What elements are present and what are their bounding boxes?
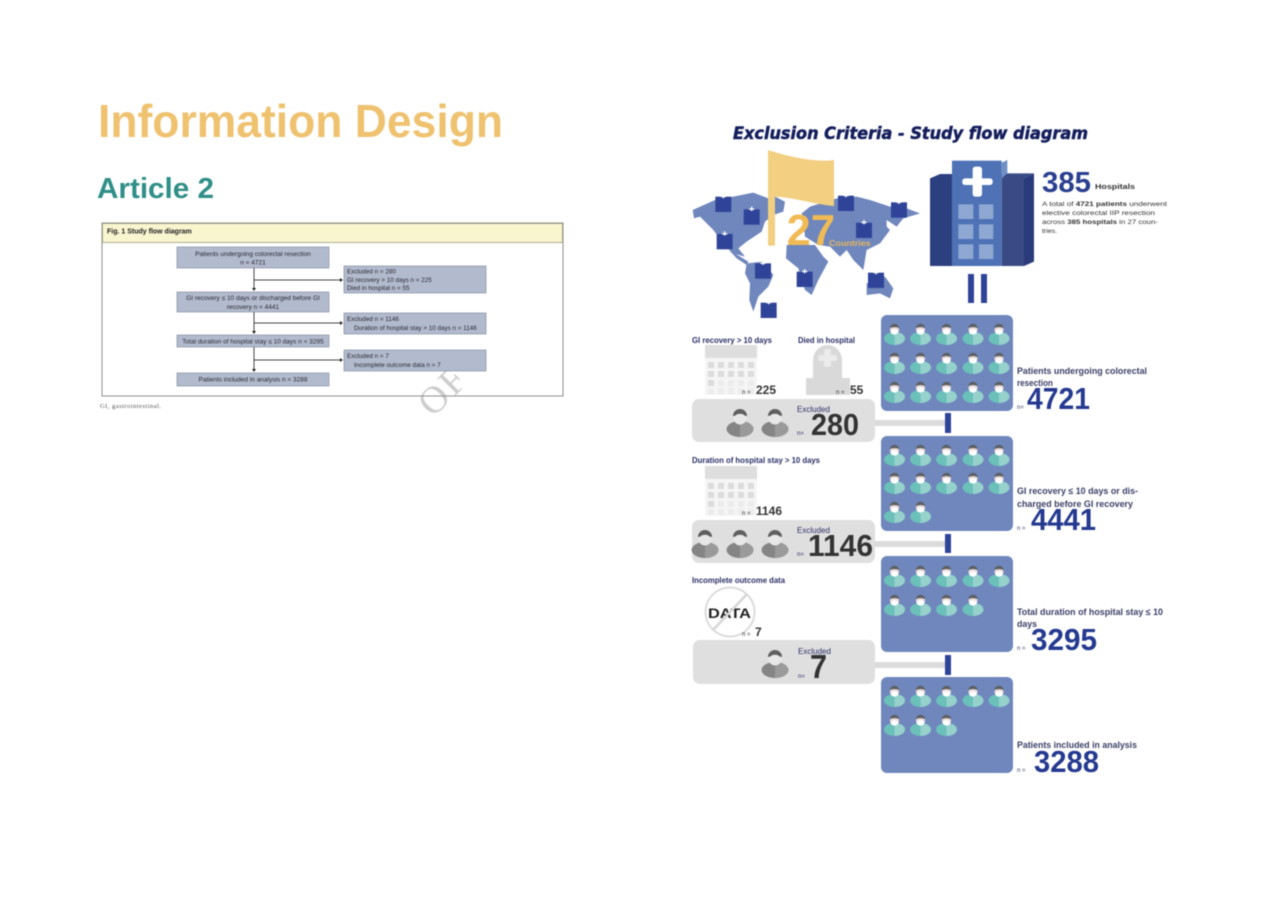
count 7: n = [742,632,751,638]
label: total duration 3295: days [1017,619,1037,629]
icon: calendar [705,466,757,516]
exclusion box 1: GI recovery > 10 days n = 225 [347,277,432,284]
label: GI recovery 4441 [1017,486,1138,537]
label: GI recovery 4441: GI recovery ≤ 10 days or dis- [1017,486,1138,496]
block: incomplete outcome data exclusion [692,576,786,639]
hospitals description: tries. [1042,228,1057,235]
flow box: included in analysis: Patients included in analysis n = 3288 [199,376,308,384]
label: GI recovery 4441: charged before GI recovery [1017,499,1133,509]
flow connector arrows [252,268,343,372]
flag [768,150,834,246]
panel: excluded 1146 [692,520,875,563]
flow box: included in analysis [177,373,329,386]
watermark fragment: OF [410,357,477,424]
title: Information Design: Information Design [98,95,503,147]
exclusion box 2: Excluded n = 1146 [347,316,399,323]
label: patients undergoing colorectal resection 4721: resection [1017,378,1053,388]
hospitals description: A total of 4721 patients underwent [1042,201,1167,208]
figure footnote: GI, gastrointestinal. [100,403,161,410]
panel: excluded 7 [693,640,875,685]
block: GI recovery exclusion [692,336,776,397]
label: total duration 3295 [1017,607,1163,657]
countries label: Countries [829,239,871,248]
panel: excluded 280 [692,399,875,442]
panel: excluded 7: 7 [810,648,827,685]
flow box: patients undergoing colorectal resection: n = 4721 [240,260,266,266]
label: total duration 3295: n = [1017,646,1026,652]
exclusion box 3 [344,350,486,371]
hospitals description: across 385 hospitals in 27 coun- [1042,219,1158,226]
panel: excluded 1146: 1146 [808,528,873,563]
heading: Article 2: Article 2 [97,173,214,205]
panel: original study flow diagram figure [100,223,563,424]
panel: excluded 280: n= [797,431,804,437]
385 number: 385 [1042,167,1091,199]
label: GI recovery over 10 days: GI recovery > 10 days [692,336,773,345]
flow box: patients undergoing colorectal resection: Patients undergoing colorectal resection [195,251,311,258]
count 1146: 1146 [756,504,782,518]
label: duration of hospital stay: Duration of hospital stay > 10 days [692,456,821,465]
panel: 4441 patients icons [881,436,1013,531]
icon: tombstone [806,345,850,395]
panel: 3288 patients icons [881,677,1013,773]
flow box: GI recovery: recovery n = 4441 [227,304,279,311]
connector bar 1 [945,413,951,433]
panel: 4721 patients icons [881,315,1013,411]
label: incomplete outcome data: Incomplete outcome data [692,576,786,585]
connector: excluded 7 to flow [875,662,945,668]
figure header [102,224,562,242]
figure header: Fig. 1 Study flow diagram [107,228,192,236]
panel: excluded 7: n= [798,674,805,680]
hospitals label: Hospitals [1095,184,1135,191]
map continents [693,193,920,312]
label: total duration 3295: Total duration of hospital stay ≤ 10 [1017,607,1163,617]
icon: hospital building [930,160,1034,266]
panel: excluded 1146: n= [797,552,804,558]
figure frame [102,223,563,396]
exclusion box 2 [344,313,486,334]
hospitals stat text [1042,167,1167,235]
hospitals description [1042,201,1167,235]
panel: excluded 280: Excluded [797,405,830,414]
flow box: total duration: Total duration of hospital stay ≤ 10 days n = 3295 [182,338,324,346]
block: died in hospital exclusion [798,336,864,397]
label: patients undergoing colorectal resection 4721 [1017,366,1147,416]
count 225: 225 [756,383,776,397]
infographic title: Exclusion Criteria - Study flow diagram [733,124,1088,143]
exclusion box 2: Duration of hospital stay > 10 days n = 1146 [354,325,477,332]
label: patients included 3288: 3288 [1034,744,1099,779]
connector bar 3 [945,655,951,675]
label: patients undergoing colorectal resection 4721: n= [1017,405,1024,411]
label: died in hospital: Died in hospital [798,336,855,345]
equals connector bars [968,274,987,303]
exclusion box 1: Excluded n = 280 [347,268,396,276]
label: GI recovery 4441: n = [1017,526,1026,532]
panel: 3295 patients icons [881,556,1013,652]
world map with flag and hospital pins [693,150,920,318]
icon: calendar [705,345,757,395]
count 55: n = [836,390,845,396]
connector bar 2 [945,534,951,553]
exclusion box 3: Excluded n = 7 [347,353,389,360]
panel: excluded 1146: Excluded [797,526,830,535]
label: total duration 3295: 3295 [1031,622,1097,657]
flow box: GI recovery [177,292,329,312]
flow box: total duration [177,335,329,347]
panel: excluded 7: Excluded [798,647,831,656]
label: patients included 3288: Patients included in analysis [1017,740,1137,750]
label: patients included 3288: n = [1017,768,1026,774]
count 7: 7 [755,625,762,639]
exclusion box 1 [344,266,486,293]
label: patients undergoing colorectal resection 4721: 4721 [1027,381,1090,416]
flow box: patients undergoing colorectal resection [177,247,329,268]
connector: excluded 1146 to flow [875,541,945,547]
connector: excluded 280 to flow [875,420,945,426]
label: patients included 3288 [1017,740,1137,779]
exclusion box 1: Died in hospital n = 55 [347,285,410,292]
count 225: n = [742,390,751,396]
icon: no data: DATA [708,605,751,621]
block: duration of stay exclusion [692,456,821,518]
hospital pins [715,193,907,318]
exclusion box 3: Incomplete outcome data n = 7 [354,362,441,369]
label: patients undergoing colorectal resection 4721: Patients undergoing colorectal [1017,366,1147,376]
count 1146: n = [742,511,751,517]
27 countries number: 27 [787,207,835,255]
count 55: 55 [850,383,864,397]
label: GI recovery 4441: 4441 [1031,502,1096,537]
hospitals description: elective colorectal IIP resection [1042,210,1155,217]
panel: excluded 280: 280 [811,407,859,442]
flow box: GI recovery: GI recovery ≤ 10 days or discharged before GI [186,295,320,302]
